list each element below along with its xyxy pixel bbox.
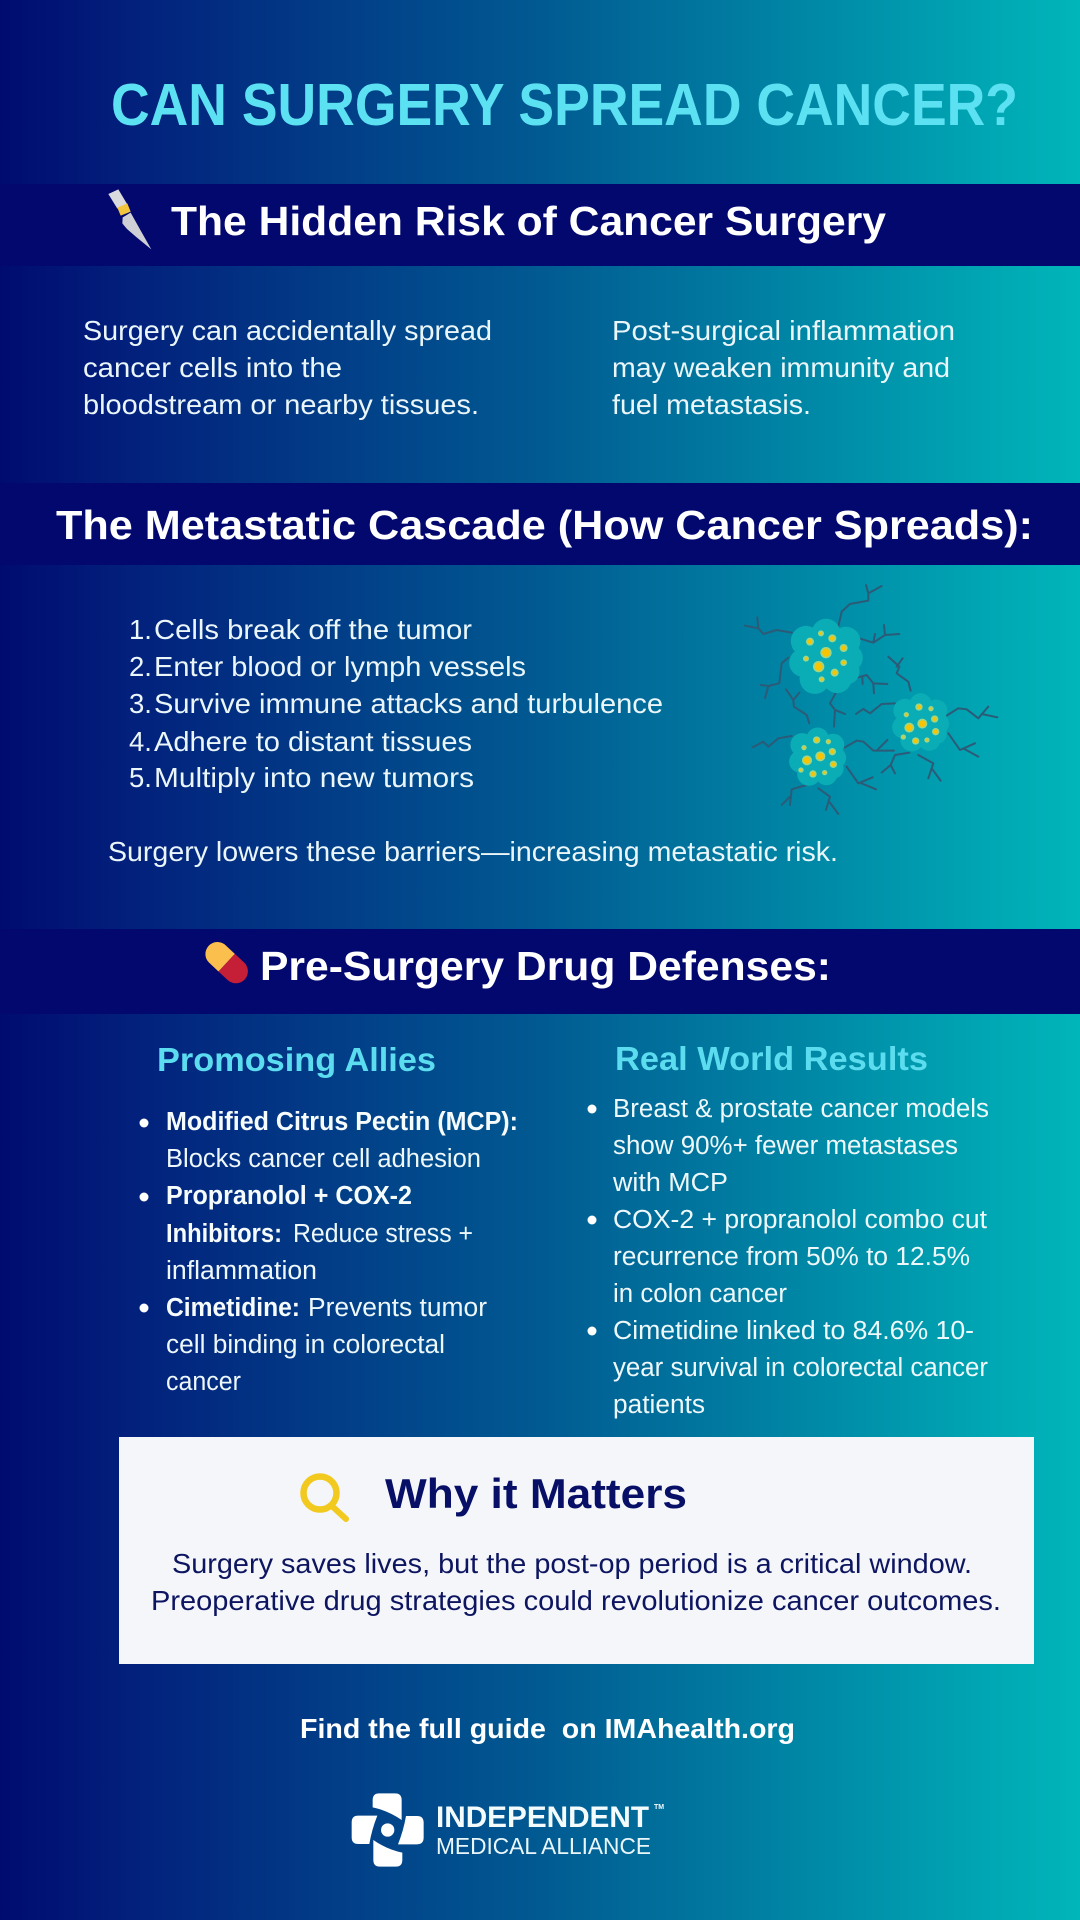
numbered list: cascade steps: Enter blood or lymph vessels: [154, 651, 526, 682]
column: real world results: [588, 1040, 989, 1419]
bullet list: allies: inflammation: [166, 1257, 317, 1285]
bullet list: allies: Prevents tumor: [308, 1294, 488, 1322]
text: why it matters body: Preoperative drug strategies could revolutionize cancer outcomes.: [151, 1585, 1001, 1616]
subheading: promosing allies: Promosing Allies: [157, 1041, 436, 1078]
text block: inflammation: Post-surgical inflammation: [612, 315, 955, 346]
icon: logo cross: [352, 1793, 424, 1867]
bullet list: results: year survival in colorectal cancer: [613, 1354, 989, 1382]
numbered list: cascade steps: Survive immune attacks and turbulence: [154, 688, 663, 719]
text block: inflammation: may weaken immunity and: [612, 352, 950, 383]
logo wordmark: MEDICAL ALLIANCE: [436, 1833, 651, 1859]
logo wordmark: [436, 1801, 664, 1859]
bullet list: results: [588, 1095, 989, 1419]
numbered list: cascade steps: Adhere to distant tissues: [154, 726, 472, 757]
heading: drug defenses: Pre-Surgery Drug Defenses:: [260, 943, 831, 989]
numbered list: cascade steps: 1.: [129, 614, 152, 645]
bullet list: results: Breast & prostate cancer models: [613, 1095, 989, 1123]
heading: metastatic cascade: The Metastatic Cascade (How Cancer Spreads):: [56, 502, 1033, 548]
numbered list: cascade steps: [129, 614, 663, 793]
bullet list: results: with MCP: [612, 1169, 728, 1197]
bullet list: allies: Blocks cancer cell adhesion: [166, 1145, 481, 1173]
bullet list: results: Cimetidine linked to 84.6% 10-: [613, 1317, 974, 1345]
text block: spread into bloodstream: Surgery can accidentally spread: [83, 315, 492, 346]
logo wordmark: INDEPENDENT: [436, 1801, 649, 1834]
bullet list: allies: Propranolol + COX-2: [166, 1182, 412, 1210]
subheading: real world results: Real World Results: [615, 1040, 928, 1077]
illustration: tumor cells: [745, 585, 997, 814]
bullet list: allies: Modified Citrus Pectin (MCP):: [166, 1108, 518, 1136]
bullet list: results: show 90%+ fewer metastases: [613, 1132, 958, 1160]
bullet list: results: COX-2 + propranolol combo cut: [613, 1206, 987, 1234]
icon: scalpel: [108, 189, 151, 249]
bullet list: allies: Reduce stress +: [293, 1220, 473, 1248]
heading: hidden risk: The Hidden Risk of Cancer Surgery: [171, 198, 886, 244]
logo: independent medical alliance: [352, 1793, 664, 1867]
heading: why it matters: Why it Matters: [385, 1470, 687, 1517]
bullet list: allies: Inhibitors:: [166, 1220, 282, 1248]
numbered list: cascade steps: Multiply into new tumors: [154, 762, 474, 793]
bullet list: allies: cancer: [166, 1368, 241, 1396]
numbered list: cascade steps: 3.: [129, 688, 152, 719]
bullet list: allies: cell binding in colorectal: [166, 1331, 445, 1359]
bullet list: allies: [140, 1108, 518, 1396]
numbered list: cascade steps: 4.: [129, 726, 152, 757]
icon: pill: [200, 937, 253, 988]
section band: hidden risk: [0, 184, 1080, 266]
section band: metastatic cascade: [0, 483, 1080, 565]
bullet list: results: in colon cancer: [613, 1280, 788, 1308]
text block: spread into bloodstream: bloodstream or nearby tissues.: [83, 389, 479, 420]
text block: inflammation: [612, 315, 955, 420]
bullet list: results: recurrence from 50% to 12.5%: [613, 1243, 970, 1271]
bullet list: results: patients: [613, 1391, 705, 1419]
logo wordmark: TM: [654, 1804, 664, 1811]
text: why it matters body: [151, 1548, 1001, 1616]
text block: spread into bloodstream: cancer cells into the: [83, 352, 342, 383]
text: surgery lowers barriers: Surgery lowers these barriers—increasing metastatic risk.: [108, 836, 838, 867]
section band: drug defenses: [0, 929, 1080, 1014]
numbered list: cascade steps: 2.: [129, 651, 152, 682]
call to action: Find the full guide on IMAhealth.org: [300, 1713, 795, 1744]
column: promising allies: [140, 1041, 518, 1396]
numbered list: cascade steps: Cells break off the tumor: [154, 614, 472, 645]
text block: spread into bloodstream: [83, 315, 492, 420]
bullet list: allies: Cimetidine:: [166, 1294, 300, 1322]
panel: why it matters: [119, 1437, 1034, 1664]
text: why it matters body: Surgery saves lives, but the post-op period is a critical window.: [172, 1548, 972, 1579]
icon: magnifying glass: [304, 1476, 346, 1519]
text block: inflammation: fuel metastasis.: [612, 389, 811, 420]
numbered list: cascade steps: 5.: [129, 762, 152, 793]
